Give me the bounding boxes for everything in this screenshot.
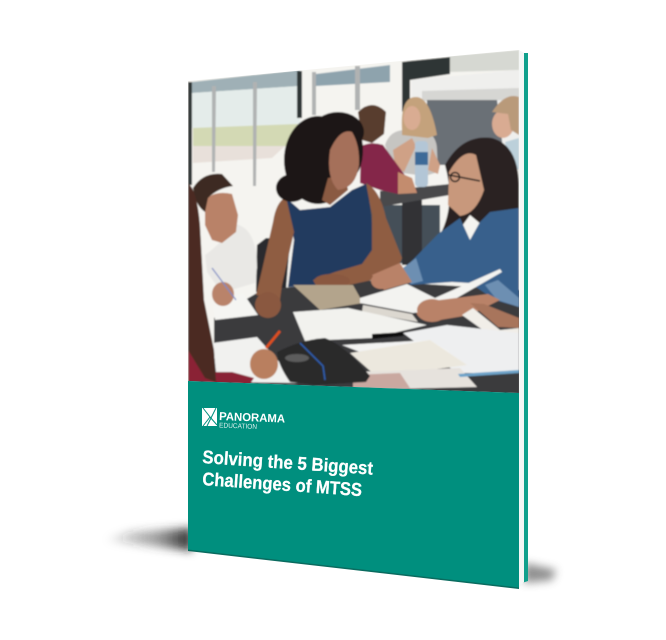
notebook in front of boy [214,298,259,322]
paper under the writing hand [213,337,298,383]
teacher arms [256,183,402,300]
black pouch [277,338,370,385]
papers lower right [342,325,519,390]
teacher hands [254,273,328,319]
table [188,280,520,395]
boy hand writing [212,268,236,306]
student on right [492,96,519,170]
blonde student [385,97,440,176]
book spine and pages [519,50,528,588]
stacked books lower right [462,303,519,333]
teal cover panel [188,381,519,588]
tan closed notebook [293,285,363,310]
cover bottom edge [188,550,519,589]
girl hand over book [417,294,500,321]
right girl hair [442,137,519,232]
water bottle [415,141,428,187]
dark window posts [188,57,450,185]
denim jacket [403,208,519,307]
window frames [212,66,360,186]
left girl plaid sleeve [188,350,254,384]
centre open notebook [293,308,427,341]
teacher curly hair [276,112,364,204]
man in maroon shirt [358,105,417,194]
chairs behind the table [256,200,440,292]
book title: Solving the 5 Biggest [202,446,374,479]
boy head [193,174,238,243]
logo wordmark: PANORAMA [219,411,285,426]
book title: Challenges of MTSS [202,468,363,500]
photo background: bright windows [180,45,525,400]
book shadow [103,528,556,583]
woman teacher dress [285,183,372,287]
cover photo: classroom scene [180,45,525,400]
background table [380,184,450,207]
right girl forearm and hands [371,263,448,322]
teacher neck and face [322,131,359,205]
jacket light sleeve details [403,258,519,307]
left girl hand and pencil [250,331,280,379]
open book held by girl [360,269,502,322]
left girl long hair [188,183,216,382]
logo subtitle: EDUCATION [219,423,257,431]
outdoor view through windows [192,50,519,163]
logo mark [202,408,217,426]
logo: Panorama Education [202,408,285,431]
back wall with grey panel [421,87,519,166]
right girl face [448,153,484,216]
boy student shirt [205,224,257,293]
book title [202,446,374,500]
